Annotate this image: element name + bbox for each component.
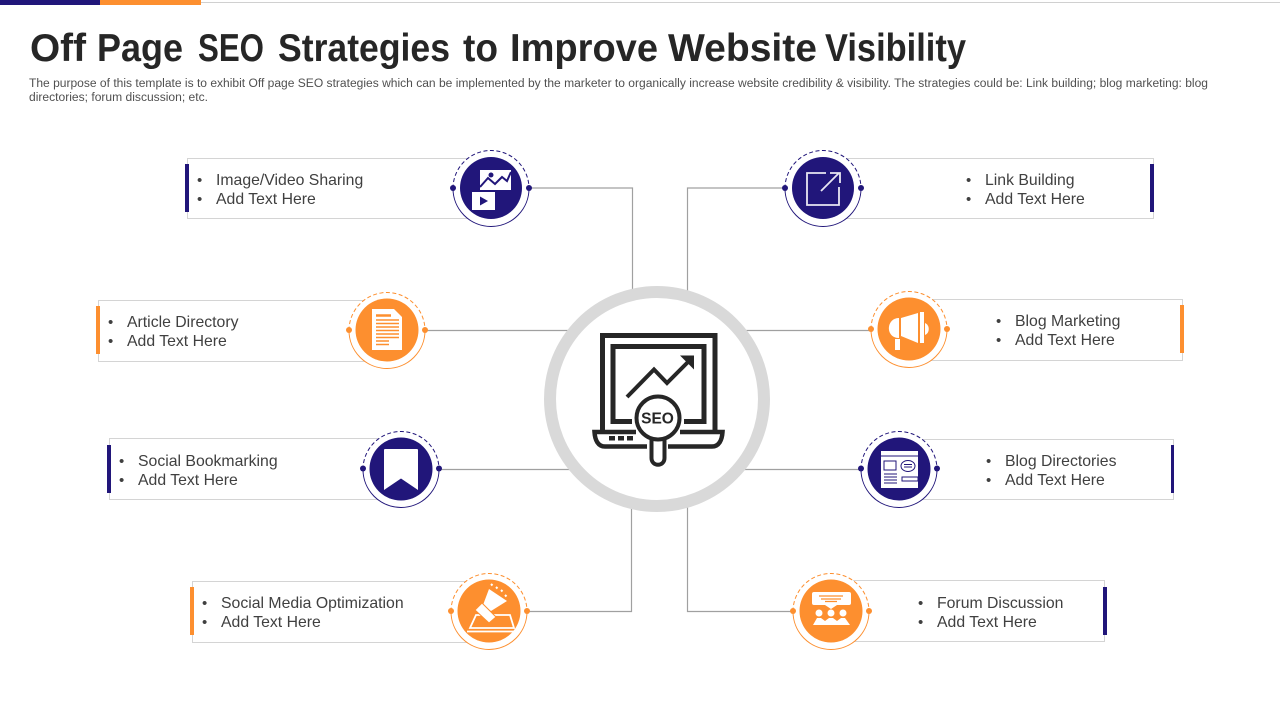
bullet text: • [996, 332, 1001, 349]
bullet text: Forum Discussion [937, 595, 1063, 612]
icon: external link [782, 150, 864, 226]
bullet text: • [918, 614, 923, 631]
item: Article Directory [96, 292, 428, 368]
bullet text: • [119, 472, 124, 489]
bullet text: Blog Directories [1005, 453, 1117, 470]
bullet text: Social Bookmarking [138, 453, 278, 470]
bullet text [918, 595, 1063, 631]
item: Blog Directories [858, 432, 1174, 508]
bullet text: • [966, 191, 971, 208]
bullet text: • [202, 614, 207, 631]
title [30, 27, 966, 70]
bullet text: Image/Video Sharing [216, 172, 363, 189]
bullet text: • [197, 191, 202, 208]
bullet text [986, 453, 1117, 489]
bullet text: • [197, 172, 202, 189]
bullet text [966, 172, 1085, 208]
item: Blog Marketing [868, 292, 1184, 368]
item: Forum Discussion [790, 574, 1107, 650]
title: Improve [510, 27, 658, 70]
icon: image and video [450, 150, 532, 226]
bullet text [202, 595, 404, 631]
icon: laptop with SEO magnifier [594, 336, 722, 465]
icon: web page with comment [858, 432, 940, 508]
description text [29, 78, 1208, 104]
bullet text: • [986, 453, 991, 470]
bullet text: • [108, 314, 113, 331]
bullet text: Link Building [985, 172, 1075, 189]
hub ring [550, 292, 764, 506]
item: Social Bookmarking [107, 432, 442, 508]
bullet text: Add Text Here [221, 614, 321, 631]
bullet text: • [996, 313, 1001, 330]
bullet text [108, 314, 239, 350]
top accent bar [0, 0, 1280, 5]
bullet text: Add Text Here [1005, 472, 1105, 489]
item: Social Media Optimization [190, 574, 530, 650]
title: Off [30, 27, 87, 70]
bullet text: • [108, 333, 113, 350]
title: Visibility [825, 27, 966, 70]
bullet text: Add Text Here [937, 614, 1037, 631]
icon label: SEO: SEO [641, 410, 674, 428]
description text: directories; forum discussion; etc. [29, 92, 208, 104]
title: Page [97, 27, 183, 70]
title: Strategies [278, 27, 450, 70]
bullet text [996, 313, 1120, 349]
description text: The purpose of this template is to exhibit Off page SEO strategies which can be implemented by the marketer to organically increase website credibility & visibility. The strategies could be: Link building; blog marketing: blog [29, 78, 1208, 90]
title: SEO [198, 27, 264, 70]
item: Image/Video Sharing [185, 150, 532, 226]
bullet text: Article Directory [127, 314, 239, 331]
central SEO hub [550, 292, 764, 506]
bullet text: • [119, 453, 124, 470]
bullet text: • [986, 472, 991, 489]
bullet text: Social Media Optimization [221, 595, 404, 612]
icon: bookmark [360, 432, 442, 508]
bullet text [197, 172, 363, 208]
item: Link Building [782, 150, 1154, 226]
bullet text [119, 453, 278, 489]
bullet text: Add Text Here [138, 472, 238, 489]
title: Website [668, 27, 817, 70]
bullet text: Add Text Here [985, 191, 1085, 208]
bullet text: • [918, 595, 923, 612]
connector lines [425, 188, 871, 612]
icon: megaphone [868, 292, 950, 368]
bullet text: Add Text Here [216, 191, 316, 208]
icon: document [346, 292, 428, 368]
title: to [463, 27, 498, 70]
bullet text: Blog Marketing [1015, 313, 1120, 330]
bullet text: Add Text Here [127, 333, 227, 350]
icon: group discussion [790, 574, 872, 650]
icon: megaphone on tablet [448, 574, 530, 650]
bullet text: • [966, 172, 971, 189]
bullet text: Add Text Here [1015, 332, 1115, 349]
bullet text: • [202, 595, 207, 612]
